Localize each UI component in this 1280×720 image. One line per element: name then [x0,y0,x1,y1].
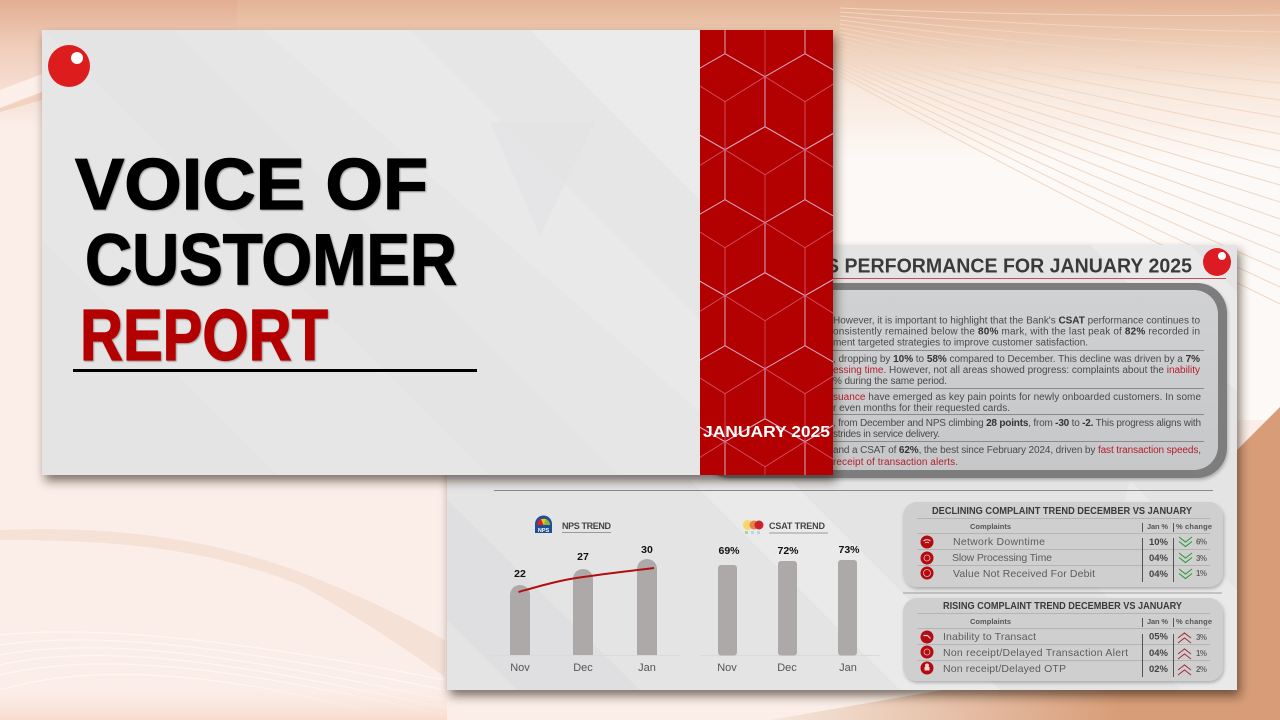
table: declining complaints [903,502,1223,587]
values: NPS [514,544,653,580]
top left ribbon [0,74,42,108]
title: REPORT [80,296,328,376]
table heading: RISING COMPLAINT TREND DECEMBER VS JANUARY [943,601,1182,612]
top right contour lines [840,8,1280,304]
axis labels: NPS: Dec [573,662,593,674]
row: slow processing time [920,552,1207,564]
table header: Jan % [1147,617,1168,626]
paragraph: best csat [833,445,1201,468]
table: rising complaints [903,598,1223,681]
table heading: DECLINING COMPLAINT TREND DECEMBER VS JANUARY [932,506,1192,517]
table header [970,617,1212,626]
paragraph: nps climb [833,418,1201,440]
icon: NPS gauge [535,516,552,534]
slide sheen [447,245,1237,690]
axis labels: CSAT [717,662,857,674]
paragraph: csat overview: However, it is important to highlight that the Bank's CSAT performance continues to [833,316,1200,326]
row: inability to transact: Inability to Transact [943,631,1036,643]
paragraph: card issuance: suance have emerged as key pain points for newly onboarded customers. In some [833,392,1201,403]
row: value not received: 1% [1196,569,1207,578]
row: inability to transact: 05% [1149,632,1169,642]
row: delayed transaction alert: 1% [1196,649,1207,658]
slide background [447,245,1237,690]
icon: CSAT faces [743,520,764,534]
row: network downtime: Network Downtime [953,536,1045,548]
table header: Jan % [1147,522,1168,531]
lower left contour lines [0,632,445,720]
paragraph: best csat: receipt of transaction alerts. [833,457,958,468]
axis labels: CSAT: Jan [839,662,857,674]
paragraph: nps climb: strides in service delivery. [833,429,940,440]
values: CSAT [718,544,860,557]
row: value not received [920,566,1207,580]
icon: logo ball [48,45,90,87]
table header [970,522,1212,531]
paragraph: complaint decline: essing time. However, not all areas showed progress: complaints about the inability [833,365,1200,376]
axis labels: CSAT: Dec [777,662,797,674]
paragraph: complaint decline [833,354,1200,387]
heading: NPS trend: NPS TREND [562,521,612,531]
lower left ribbon [0,529,445,677]
heading: CSAT trend: CSAT TREND [769,521,826,531]
values: CSAT: 73% [838,544,860,556]
chart: CSAT trend [700,520,880,674]
icon: logo ball small [1203,248,1231,276]
axis labels: NPS: Jan [638,662,656,674]
chart: NPS trend [490,516,680,674]
row: network downtime: 6% [1196,538,1207,546]
cover background [42,30,833,475]
paragraph: csat overview: ment targeted strategies to improve customer satisfaction. [833,338,1088,348]
trend line [518,568,654,592]
paragraph: complaint decline: % during the same period. [833,376,947,387]
hexagon pattern [700,30,833,475]
row: slow processing time: 3% [1196,554,1207,563]
paragraph: card issuance: r even months for their requested cards. [833,403,1010,414]
row: delayed transaction alert: 04% [1149,648,1169,659]
table header: Complaints [970,522,1011,531]
title: CUSTOMER [85,220,457,300]
row: value not received: Value Not Received For Debit [953,568,1095,580]
panel: summary text box [700,283,1227,478]
values: CSAT: 72% [777,545,799,557]
table header: % change [1176,522,1212,531]
table header: % change [1176,617,1212,626]
axis labels: NPS [510,662,656,674]
panel: cover slide [38,28,844,488]
title [75,145,457,376]
row: slow processing time: Slow Processing Time [952,552,1052,564]
axis labels: CSAT: Nov [717,662,737,674]
paragraph: csat overview: onsistently remained below the 80% mark, with the last peak of 82% recorded in [833,326,1200,338]
paragraph: nps climb: , from December and NPS climbing 28 points, from -30 to -2. This progress aligns with [833,418,1201,429]
row: delayed transaction alert: Non receipt/Delayed Transaction Alert [943,647,1128,659]
panel: red hexagon band [700,30,833,475]
values: NPS: 27 [577,551,589,563]
values: CSAT: 69% [718,545,740,557]
axis labels: NPS: Nov [510,662,530,674]
date label: JANUARY 2025 [703,424,830,441]
row: delayed OTP: Non receipt/Delayed OTP [943,663,1066,675]
paragraph: best csat: and a CSAT of 62%, the best since February 2024, driven by fast transaction speeds, [833,445,1201,456]
row: slow processing time: 04% [1149,553,1169,564]
slide heading: S PERFORMANCE FOR JANUARY 2025 [826,256,1192,278]
row: delayed transaction alert [920,646,1207,659]
panel: performance summary slide [447,245,1237,690]
row: value not received: 04% [1149,569,1169,580]
cover sheen [42,30,700,475]
paragraph: card issuance [833,392,1201,414]
values: NPS: 22 [514,568,526,580]
title: VOICE OF [75,145,428,225]
table header: Complaints [970,617,1011,626]
values: NPS: 30 [641,544,653,556]
bars: NPS [510,559,657,655]
row: delayed OTP [920,662,1207,675]
icon: NPS gauge: NPS [538,528,549,534]
row: delayed OTP: 02% [1149,664,1169,675]
bars: CSAT [718,560,857,656]
row: delayed OTP: 2% [1196,665,1207,674]
paragraph: csat overview [833,316,1200,348]
row: inability to transact: 3% [1196,633,1207,642]
paragraph: complaint decline: , dropping by 10% to 58% compared to December. This decline was driven by a 7% [833,354,1200,365]
row: network downtime: 10% [1149,537,1169,548]
lower right brown area [770,407,1280,720]
row: inability to transact [920,630,1207,644]
row: network downtime [920,536,1207,548]
